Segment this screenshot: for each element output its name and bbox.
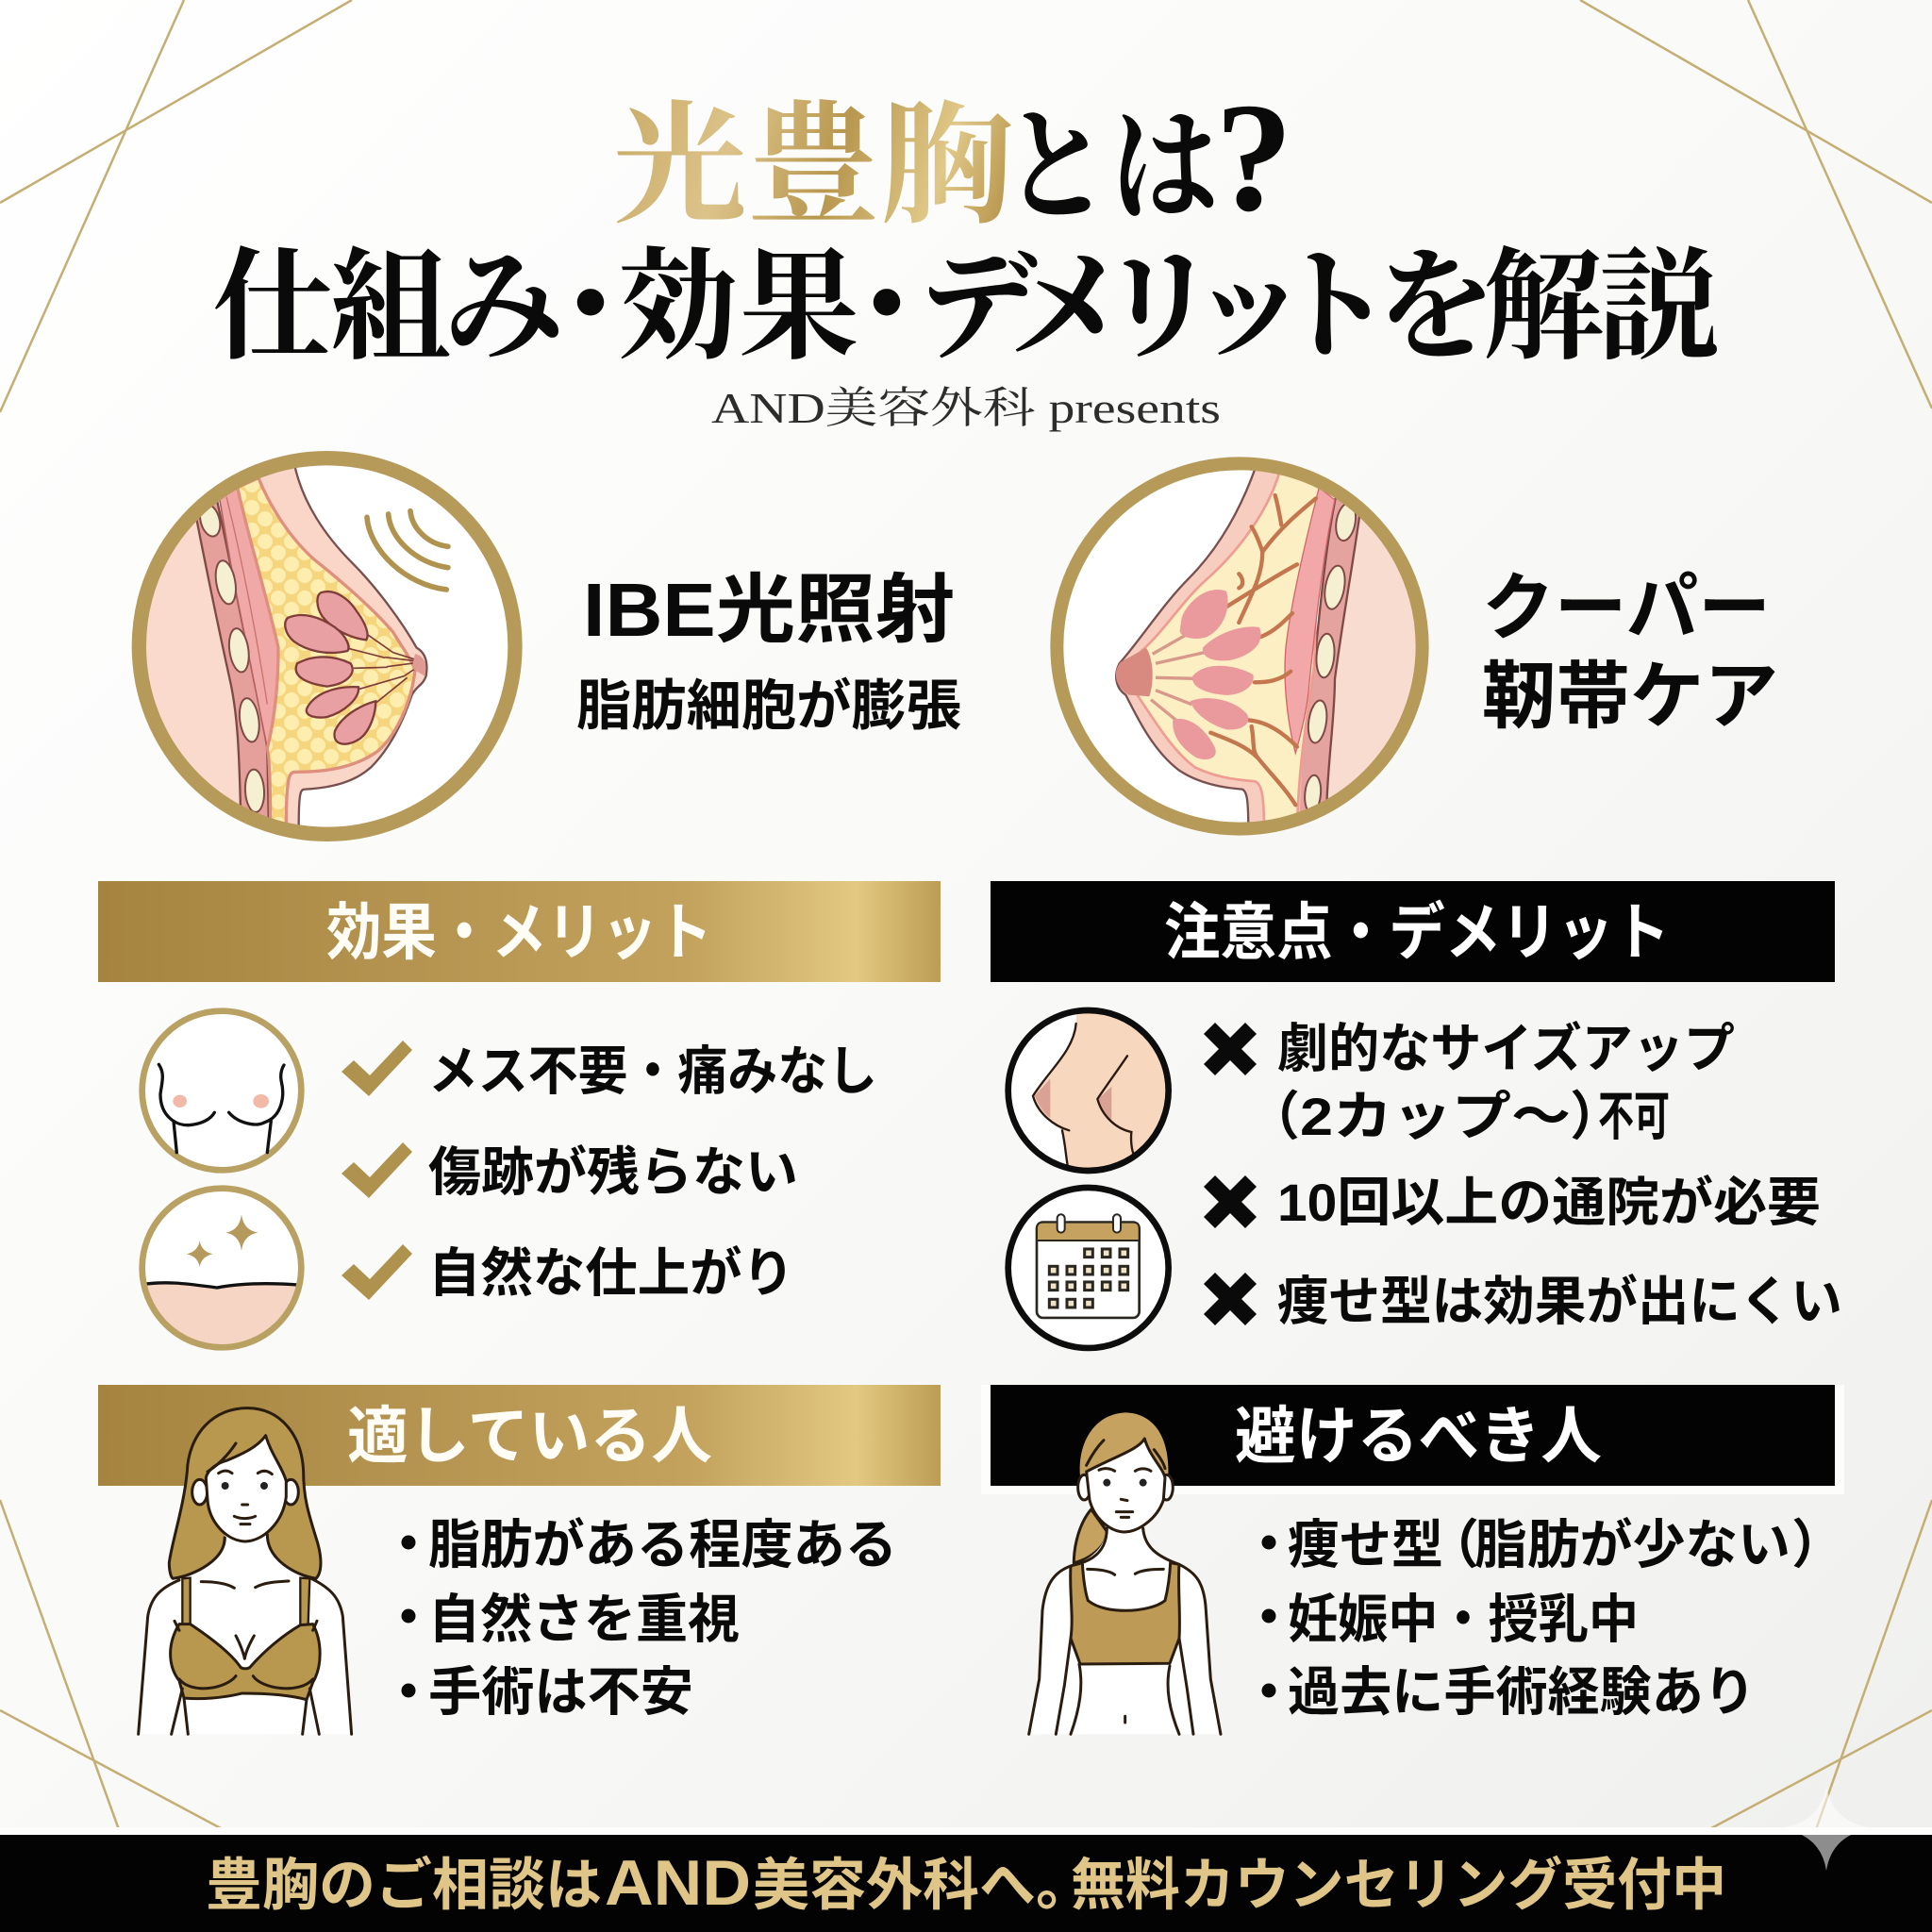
panel: people to avoid list [1262, 1515, 1844, 1722]
checklist text: 傷跡が残らない [428, 1142, 798, 1202]
list text [428, 1515, 897, 1722]
checklist text: 自然な仕上がり [428, 1243, 794, 1303]
check marks [341, 1041, 412, 1300]
checklist text: メス不要・痛みなし [428, 1041, 877, 1101]
caution text: ） [1570, 1087, 1623, 1146]
IBE heading: IBE光照射 [583, 568, 955, 652]
icon: Cooper ligament breast cross-section [1057, 463, 1434, 830]
IBE subtitle: 脂肪細胞が膨張 [576, 675, 961, 737]
title line 1: ? [1215, 71, 1292, 243]
list text: 過去に手術経験あり [1288, 1662, 1756, 1722]
list text: 妊娠中・授乳中 [1288, 1590, 1639, 1649]
section header: cautions [991, 881, 1835, 982]
panel: caution icons [1008, 1009, 1186, 1348]
caution text: 痩せ型は効果が出にくい [1277, 1272, 1842, 1331]
section header: people to avoid: 避けるべき人 [1235, 1401, 1602, 1471]
panel: suitable people list [402, 1515, 897, 1722]
icon: chest outline [142, 1011, 301, 1170]
panel: merit icons [139, 1011, 305, 1352]
title line 2: 仕組み・効果・デメリットを解説 [212, 241, 1720, 375]
panel: caution list [1209, 1019, 1842, 1331]
caution text: （ [1247, 1087, 1300, 1146]
footer text: 豊胸のご相談は [206, 1854, 602, 1917]
footer text: 美容外科へ。 [753, 1854, 1092, 1917]
title line 1 [613, 71, 1292, 243]
section header: cautions: 注意点・デメリット [1164, 897, 1670, 967]
title [212, 71, 1720, 375]
heading block: Cooper ligament: クーパー [1482, 566, 1771, 649]
icon: calendar [1008, 1188, 1169, 1348]
cross marks [1209, 1028, 1251, 1320]
caution text: 10回以上の通院が必要 [1277, 1173, 1821, 1232]
list text: 手術は不安 [428, 1662, 693, 1722]
footer text: AND [605, 1847, 751, 1919]
checklist text [428, 1041, 877, 1303]
caution text [1247, 1019, 1842, 1331]
icon: light waves [367, 511, 448, 590]
caution text: 2カップ〜 [1300, 1087, 1571, 1146]
icon: IBE light breast cross-section [125, 458, 515, 834]
bullets [1262, 1536, 1275, 1698]
section header: people to avoid [981, 1385, 1844, 1494]
section header: merits: 効果・メリット [326, 897, 712, 967]
list text: 脂肪が少ない [1474, 1515, 1790, 1574]
list text: 自然さを重視 [428, 1590, 740, 1649]
section header: suitable people [98, 1385, 941, 1486]
bullets [402, 1536, 415, 1698]
icon: chest profile [1008, 1009, 1186, 1179]
illustration: woman with long hair in bra [139, 1408, 352, 1734]
caution text: 不可 [1598, 1087, 1670, 1146]
title line 1: とは [1002, 101, 1219, 237]
section header: suitable people: 適している人 [347, 1401, 712, 1471]
section header: merits [98, 881, 941, 982]
list text: （ [1426, 1515, 1479, 1574]
heading block: Cooper ligament: 靭帯ケア [1482, 655, 1778, 738]
list text: 痩せ型 [1288, 1515, 1443, 1574]
subtitle: AND美容外科 presents [711, 384, 1221, 432]
heading block: IBE light [576, 568, 961, 737]
title line 1: 光豊胸 [613, 94, 1014, 241]
footer band [0, 1827, 1932, 1932]
illustration: slim woman with ponytail in sports bra [1029, 1412, 1221, 1734]
caution text: 劇的なサイズアップ [1277, 1019, 1735, 1078]
list text: 脂肪がある程度ある [428, 1515, 897, 1574]
panel: merit checklist [341, 1041, 877, 1303]
icon: watermark sparkle [1779, 1786, 1874, 1871]
footer text [206, 1847, 1726, 1919]
list text: ） [1791, 1515, 1844, 1574]
list text [1288, 1515, 1844, 1722]
footer text: 無料カウンセリング受付中 [1071, 1854, 1726, 1917]
icon: smooth skin with sparkles [139, 1189, 305, 1352]
heading block: Cooper ligament [1482, 566, 1778, 738]
